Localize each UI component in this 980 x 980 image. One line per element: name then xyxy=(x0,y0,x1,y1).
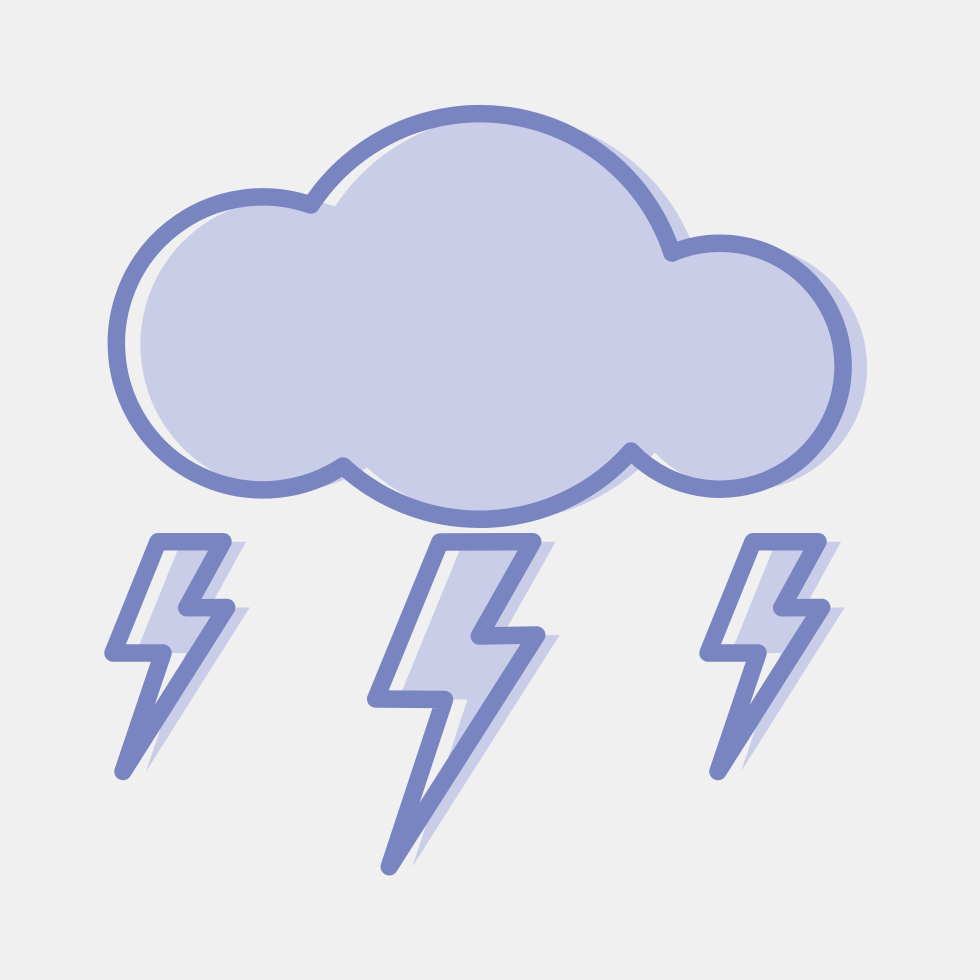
cloud shadow fill xyxy=(140,115,867,521)
left bolt shadow xyxy=(136,542,250,772)
right bolt shadow xyxy=(731,542,845,772)
right bolt outline xyxy=(708,542,822,772)
centre bolt shadow xyxy=(399,542,560,867)
cloud outline xyxy=(116,114,843,519)
icon: right lightning bolt xyxy=(708,542,845,772)
icon: centre lightning bolt xyxy=(376,542,560,867)
icon: left lightning bolt xyxy=(113,542,250,772)
left bolt outline xyxy=(113,542,227,772)
icon: cloud xyxy=(116,114,867,521)
centre bolt outline xyxy=(376,542,537,867)
